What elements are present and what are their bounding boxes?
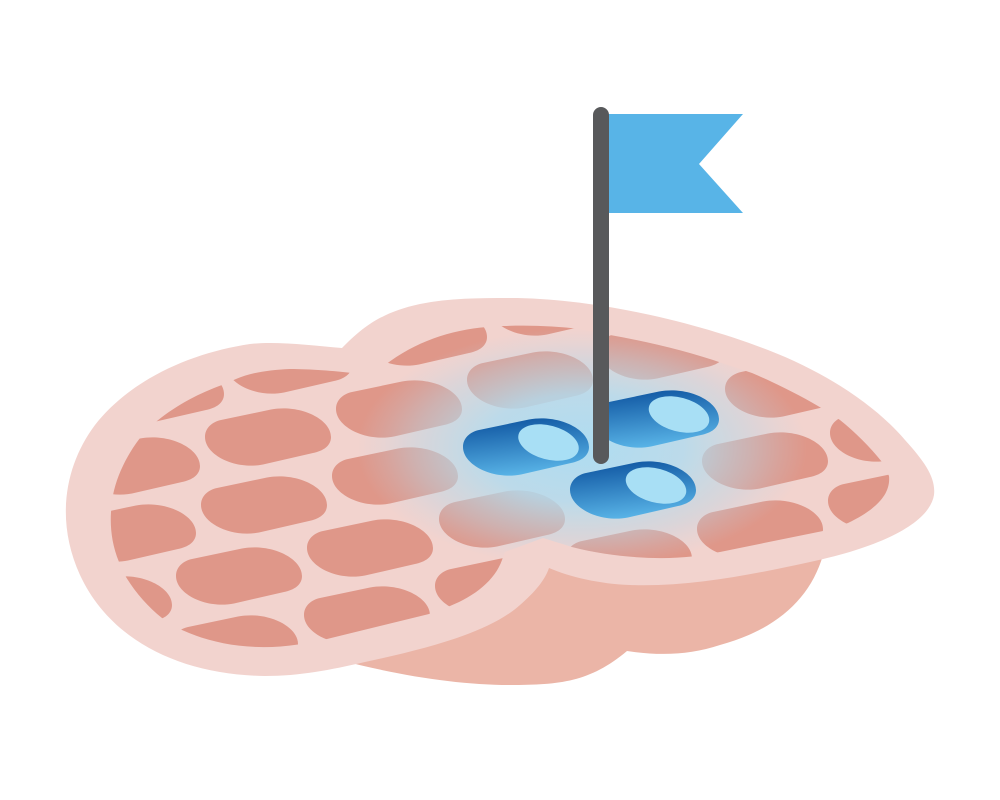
tissue underside [340, 555, 823, 685]
blue cell: upper right [593, 390, 719, 448]
tissue top surface [66, 298, 934, 676]
flag [593, 107, 743, 464]
flag pole [593, 107, 609, 464]
flag banner [606, 114, 743, 213]
tissue cells [110, 326, 890, 648]
blue cell: lower [570, 461, 696, 519]
blue cell: left [463, 418, 589, 476]
illustration: tissue with flagged blue cells [66, 107, 934, 685]
blue glow around target area [370, 336, 794, 557]
